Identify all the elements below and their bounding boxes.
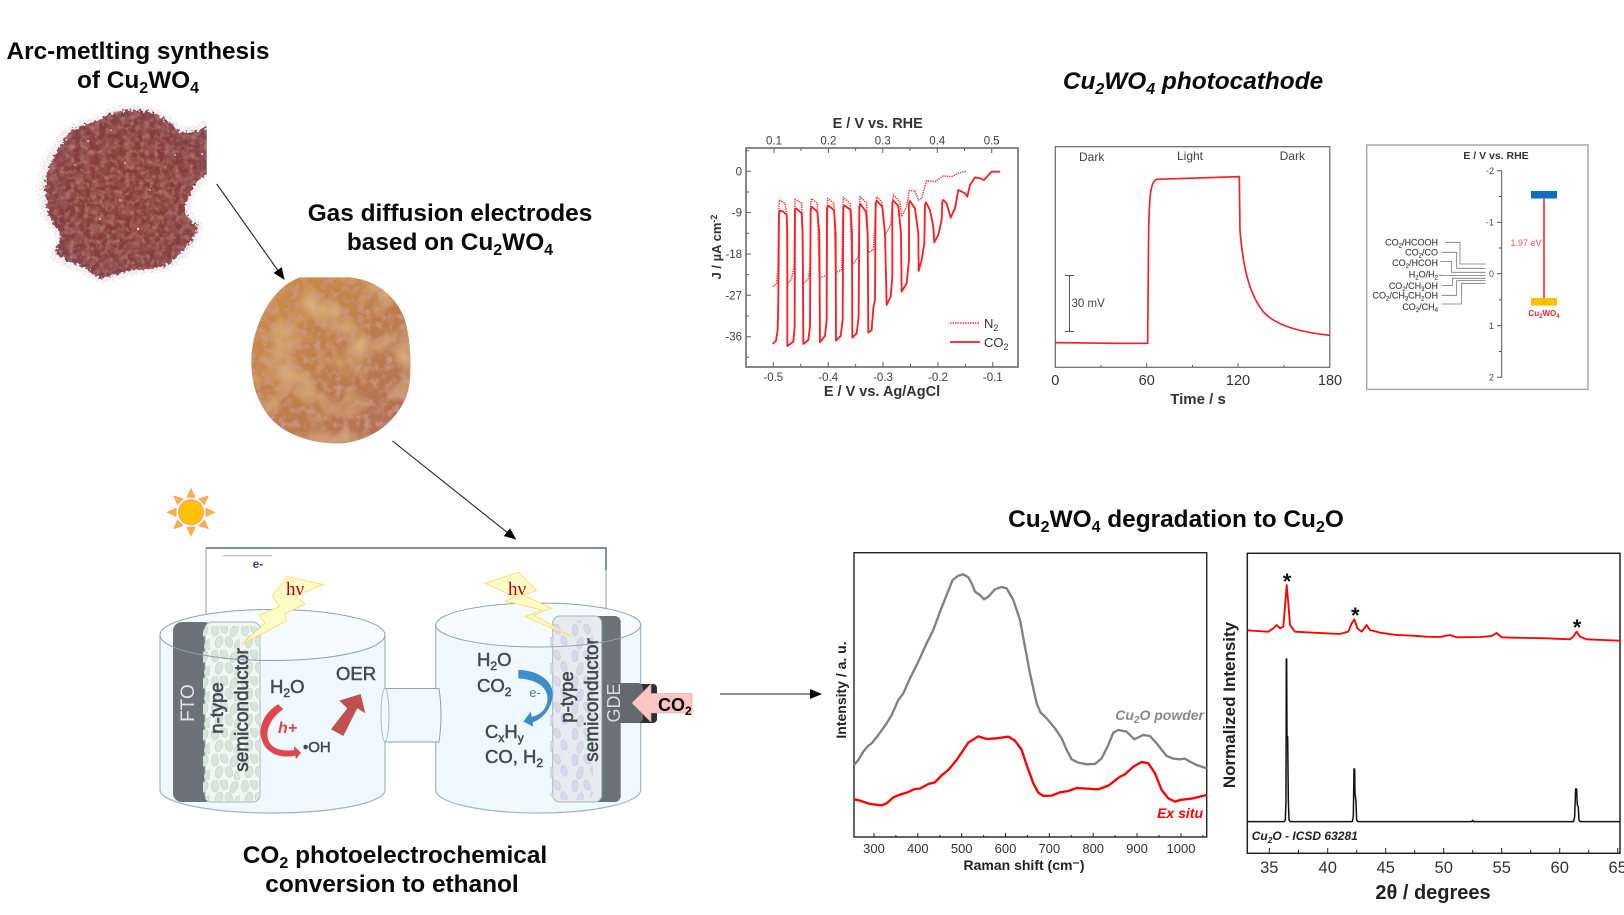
y axis: 0	[736, 166, 742, 178]
axis labels: 50	[1435, 859, 1453, 877]
y axis: -9	[732, 208, 742, 220]
top axis: 0.3	[875, 136, 891, 148]
axis labels	[833, 641, 1195, 873]
cathode species labels: O	[497, 649, 511, 670]
frame and ticks	[746, 148, 1018, 367]
redox couples: /HCOH	[1409, 258, 1438, 268]
title: gas diffusion electrodes: 4	[544, 242, 553, 259]
axis labels: 1000	[1167, 841, 1195, 856]
lightning bolt: cathode	[485, 572, 572, 637]
anode species labels: •OH	[303, 739, 331, 756]
cathode species labels: y	[518, 731, 524, 745]
title: gas diffusion electrodes: WO	[502, 229, 544, 256]
connecting tube	[381, 688, 441, 742]
axis labels: 900	[1126, 841, 1148, 856]
p-type semiconductor layer: semiconductor	[582, 638, 603, 762]
bottom axis: -0.5	[763, 372, 783, 384]
photovoltage curve	[1055, 177, 1330, 343]
lightning bolt: anode: hν	[286, 579, 304, 600]
title: CO2 photoelectrochemical conversion	[243, 842, 547, 898]
phase labels: Light	[1177, 149, 1204, 163]
chart: Raman spectra	[833, 553, 1207, 873]
n-type semiconductor layer: semiconductor	[232, 648, 253, 772]
y axis: -18	[725, 249, 742, 261]
peak markers	[1283, 569, 1582, 640]
axis labels: 55	[1493, 859, 1511, 877]
redox couples: /CH	[1419, 302, 1435, 312]
title: degradation: Cu	[1008, 506, 1041, 533]
chart: J-E photocurrent	[709, 116, 1018, 400]
anode species labels: h+	[278, 720, 297, 737]
anode cylinder rim	[160, 610, 385, 660]
y axis: -36	[725, 332, 742, 344]
title: gas diffusion electrodes: 2	[493, 242, 502, 259]
scale bar 30 mV: 30 mV	[1072, 298, 1105, 310]
title: arc-melting synthesis: WO	[148, 67, 190, 94]
redox couples: 3	[1405, 296, 1409, 302]
p-type semiconductor layer: p-type	[556, 671, 577, 723]
band gap: 4	[1556, 314, 1560, 320]
axis labels: 600	[995, 841, 1016, 856]
photo: Cu2WO4 powder	[38, 105, 213, 283]
title: degradation: WO	[1050, 506, 1092, 533]
axis labels: 500	[951, 841, 973, 856]
title: CO2 photoelectrochemical conversion: 2	[279, 855, 288, 872]
title: arc-melting synthesis: 2	[139, 80, 148, 97]
redox couples: 2	[1386, 296, 1390, 302]
cathode species labels: 2	[490, 659, 497, 673]
title: CO2 photoelectrochemical conversion: CO	[243, 842, 279, 869]
band gap: 2	[1539, 314, 1543, 320]
anode species labels: OER	[336, 663, 376, 684]
cathode species labels: H	[504, 721, 518, 742]
arrow: CO2 input: CO	[658, 695, 685, 715]
arrow: OER	[331, 694, 365, 736]
cathode cylinder	[436, 603, 641, 813]
peak markers: *	[1351, 603, 1360, 628]
external circuit wire	[206, 548, 606, 622]
axis title: E / V vs. RHE	[1463, 150, 1529, 162]
curve labels: O powder	[1139, 707, 1206, 723]
electron label on wire: e-	[253, 557, 263, 571]
scale bar 30 mV	[1065, 276, 1105, 332]
potential axis	[1486, 166, 1502, 382]
redox couples: 2	[1416, 308, 1420, 314]
GDE layer: GDE	[604, 683, 624, 723]
chart: photovoltage vs time	[1051, 147, 1342, 408]
x axis labels: 0	[1051, 373, 1059, 389]
redox couples: CH	[1408, 290, 1421, 300]
redox couples: 2	[1421, 296, 1425, 302]
title: photocathode: 2	[1094, 81, 1104, 98]
phase labels	[1079, 149, 1306, 164]
axis labels: 60	[1551, 859, 1569, 877]
axis labels: 35	[1260, 859, 1278, 877]
band gap: Cu	[1528, 309, 1539, 318]
arrow: CO2 input	[632, 684, 692, 722]
title: degradation: 2	[1316, 519, 1325, 536]
redox couples: H	[1409, 270, 1415, 280]
legend: 2	[1004, 342, 1009, 352]
axis labels	[1220, 621, 1624, 904]
reference label: 2	[1267, 835, 1273, 845]
axis labels: 700	[1038, 841, 1060, 856]
band gap	[1510, 191, 1560, 320]
N2 dotted curve	[773, 171, 967, 287]
anode cylinder	[160, 610, 385, 813]
title: degradation: degradation to Cu	[1100, 506, 1316, 533]
arrow: electrode to cell	[392, 441, 516, 539]
chart: XRD pattern	[1220, 553, 1624, 904]
title: photocathode: WO	[1104, 68, 1146, 95]
blue curved arrow	[518, 670, 553, 727]
y axis	[709, 166, 742, 344]
potential axis: 1	[1489, 321, 1494, 331]
axis labels: Raman shift (cm⁻)	[964, 857, 1084, 873]
redox couples: CO	[1385, 238, 1399, 248]
diagram: photoelectrochemical cell	[160, 548, 692, 813]
reference label: O - ICSD 63281	[1272, 829, 1358, 843]
cathode species labels: e-	[529, 685, 541, 700]
phase labels: Dark	[1079, 150, 1105, 164]
title: degradation: 4	[1092, 519, 1101, 536]
title: arc-melting synthesis: of Cu	[77, 67, 139, 94]
axis labels: Normalized Intensity	[1220, 621, 1239, 788]
cathode species labels: 2	[505, 685, 512, 699]
potential axis: -2	[1486, 166, 1494, 176]
frame and ticks	[854, 553, 1207, 837]
title: photocathode: photocathode	[1155, 68, 1323, 95]
peak markers: *	[1573, 615, 1582, 640]
redox couples: 2	[1435, 276, 1439, 282]
redox couples: CO	[1389, 281, 1402, 291]
redox couples: /CH	[1406, 281, 1421, 291]
frame and ticks	[1247, 553, 1620, 853]
arrow: CO2 input: 2	[685, 704, 692, 718]
legend: N	[984, 316, 993, 331]
photo: electrode disc	[251, 277, 410, 444]
title: photocathode: Cu	[1063, 68, 1095, 95]
n-type semiconductor layer: n-type	[206, 682, 227, 734]
black reference pattern	[1248, 659, 1620, 822]
CO2 solid curve	[773, 172, 1000, 346]
legend	[950, 316, 1009, 352]
title: arc-melting synthesis	[7, 38, 269, 97]
cathode species labels: CO	[477, 675, 505, 696]
redox couples: CO	[1372, 290, 1386, 300]
bottom axis: -0.2	[928, 372, 948, 384]
title: CO2 photoelectrochemical conversion: photoelectrochemical	[288, 842, 547, 869]
title: CO2 photoelectrochemical conversion: conversion to ethanol	[265, 871, 519, 898]
frame and ticks	[1055, 147, 1330, 367]
title: arc-melting synthesis: 4	[190, 80, 199, 97]
FTO layer: FTO	[178, 684, 199, 722]
x axis labels: Time / s	[1170, 391, 1226, 408]
anode species labels	[270, 663, 376, 756]
redox couples: 2	[1406, 264, 1410, 270]
y axis: -27	[725, 290, 742, 302]
redox couples: 2	[1419, 254, 1423, 260]
redox couples: CO	[1405, 248, 1419, 258]
anode species labels: 2	[283, 686, 290, 700]
top axis	[766, 116, 1000, 148]
n-type semiconductor layer	[203, 622, 260, 802]
icon: sun	[168, 489, 214, 536]
redox couples	[1372, 238, 1486, 314]
cathode species labels: 2	[536, 756, 543, 770]
peak markers: *	[1283, 569, 1292, 594]
redox couples: 3	[1421, 287, 1425, 293]
reference label: Cu	[1252, 829, 1268, 843]
lightning bolt: cathode: hν	[508, 579, 526, 600]
redox couples: O/H	[1419, 270, 1435, 280]
redox couples: OH	[1424, 290, 1438, 300]
bottom axis: -0.1	[983, 372, 1003, 384]
chart: energy level diagram	[1367, 145, 1588, 389]
top axis: 0.5	[984, 136, 1000, 148]
axis labels: 40	[1319, 859, 1337, 877]
grey curve	[854, 574, 1207, 768]
red curve	[854, 736, 1207, 805]
phase labels: Dark	[1280, 149, 1306, 163]
frame	[1367, 145, 1588, 389]
axis labels: 45	[1377, 859, 1395, 877]
redox couples: CO	[1392, 258, 1406, 268]
bottom axis: -0.3	[873, 372, 893, 384]
x axis labels	[1051, 373, 1342, 408]
bottom axis: E / V vs. Ag/AgCl	[824, 384, 940, 400]
cathode species labels: H	[477, 649, 490, 670]
curve labels: 2	[1133, 715, 1140, 726]
legend: CO	[984, 335, 1004, 350]
redox couples: /CO	[1422, 248, 1438, 258]
top axis: 0.2	[820, 136, 836, 148]
band gap: WO	[1542, 309, 1556, 318]
axis labels: 300	[863, 841, 885, 856]
redox couples: /HCOOH	[1402, 238, 1438, 248]
redox couples: OH	[1424, 281, 1438, 291]
cathode cylinder rim	[436, 603, 641, 647]
curve labels: Cu	[1115, 707, 1134, 723]
axis labels: 2θ / degrees	[1375, 882, 1491, 904]
red curved arrow	[261, 704, 301, 759]
redox couples: 2	[1399, 244, 1403, 250]
cathode species labels: C	[485, 721, 498, 742]
x axis labels: 120	[1226, 373, 1250, 389]
redox couples: 4	[1435, 308, 1439, 314]
x axis labels: 60	[1139, 373, 1155, 389]
FTO layer	[173, 622, 213, 802]
cathode species labels: CO, H	[485, 746, 536, 767]
redox couples: /CH	[1389, 290, 1405, 300]
y axis: J / µA cm	[709, 223, 724, 279]
top axis: E / V vs. RHE	[833, 116, 923, 132]
title: degradation: 2	[1041, 519, 1050, 536]
y axis: -2	[709, 215, 719, 223]
x axis labels: 180	[1318, 373, 1342, 389]
top axis: 0.1	[766, 136, 782, 148]
title: degradation: O	[1325, 506, 1344, 533]
potential axis: 0	[1489, 269, 1494, 279]
GDE layer	[590, 616, 657, 802]
cathode species labels	[477, 649, 543, 770]
curve labels: Ex situ	[1157, 805, 1203, 821]
top axis: 0.4	[929, 136, 946, 148]
potential axis: -1	[1486, 218, 1494, 228]
redox couples: CO	[1402, 302, 1416, 312]
title: gas diffusion electrodes	[308, 200, 592, 259]
redox couples: 2	[1415, 276, 1419, 282]
legend: 2	[993, 323, 998, 333]
cathode species labels: x	[498, 731, 504, 745]
axis labels: Intensity / a. u.	[833, 641, 849, 739]
band gap: 1.97 eV	[1510, 238, 1542, 248]
title: gas diffusion electrodes: based on Cu	[347, 229, 493, 256]
axis labels: 800	[1082, 841, 1104, 856]
title: photocathode: 4	[1145, 81, 1155, 98]
p-type semiconductor layer	[550, 616, 603, 802]
red diffractogram	[1248, 585, 1620, 641]
lightning bolt: anode	[242, 577, 323, 644]
curve labels	[1115, 707, 1206, 821]
title: arc-melting synthesis: Arc-metlting synthesis	[7, 38, 269, 65]
arrow: powder to electrode	[217, 184, 284, 279]
potential axis: 2	[1489, 372, 1494, 382]
anode species labels: H	[270, 676, 283, 697]
redox couples: 2	[1402, 287, 1406, 293]
bottom axis: -0.4	[818, 372, 839, 384]
title: gas diffusion electrodes: Gas diffusion electrodes	[308, 200, 592, 227]
bottom axis	[763, 372, 1003, 400]
axis labels: 400	[907, 841, 929, 856]
arrow: cell to degradation charts	[720, 693, 821, 695]
anode species labels: O	[290, 676, 304, 697]
